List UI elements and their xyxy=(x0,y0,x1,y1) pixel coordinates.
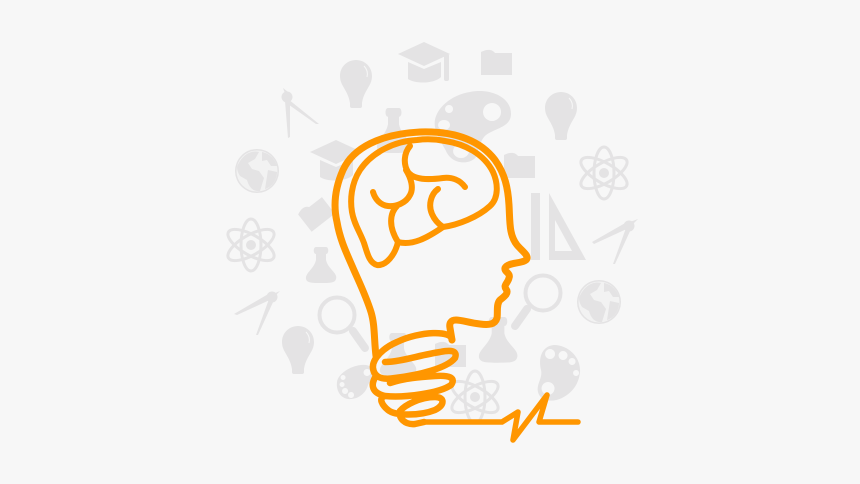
orange line drawing xyxy=(335,132,578,440)
icon: light bulb bottom left xyxy=(282,326,314,374)
icon: flask left xyxy=(306,247,336,283)
brain folds xyxy=(373,146,465,242)
icon: flask top xyxy=(377,108,410,153)
icon: flask behind coil xyxy=(380,333,416,376)
icon: palette bottom right xyxy=(538,345,580,401)
icon: book left xyxy=(297,195,335,232)
spring coil base xyxy=(373,333,456,424)
icon: palette bottom left xyxy=(337,365,376,399)
icon: atom right xyxy=(576,147,632,199)
icon: flask lower right xyxy=(479,317,517,363)
icon: light bulb top left xyxy=(340,60,372,108)
icon: book top xyxy=(481,50,512,75)
icon: palette large xyxy=(435,91,511,162)
icon: book right xyxy=(504,153,535,178)
icon: graduation cap left xyxy=(310,140,362,181)
icon: magnifier right xyxy=(515,276,560,326)
icon: globe right xyxy=(577,280,621,324)
icon: magnifier left xyxy=(320,298,365,348)
icon: graduation cap top xyxy=(398,42,450,83)
icon: atom bottom xyxy=(447,371,503,423)
icon: compass right xyxy=(592,219,638,264)
brain outline xyxy=(351,139,497,265)
icon: book bottom xyxy=(435,342,466,367)
icon: triangle ruler xyxy=(531,193,586,260)
icon: light bulb top right xyxy=(545,92,577,140)
icon: compass lower left xyxy=(234,291,280,335)
background icons xyxy=(223,42,638,423)
icon: atom left xyxy=(223,219,279,271)
icon: globe left xyxy=(235,149,279,193)
icon: compass top left xyxy=(282,88,319,138)
baseline with electric zigzag xyxy=(424,395,578,440)
head and bulb outline xyxy=(335,132,527,356)
